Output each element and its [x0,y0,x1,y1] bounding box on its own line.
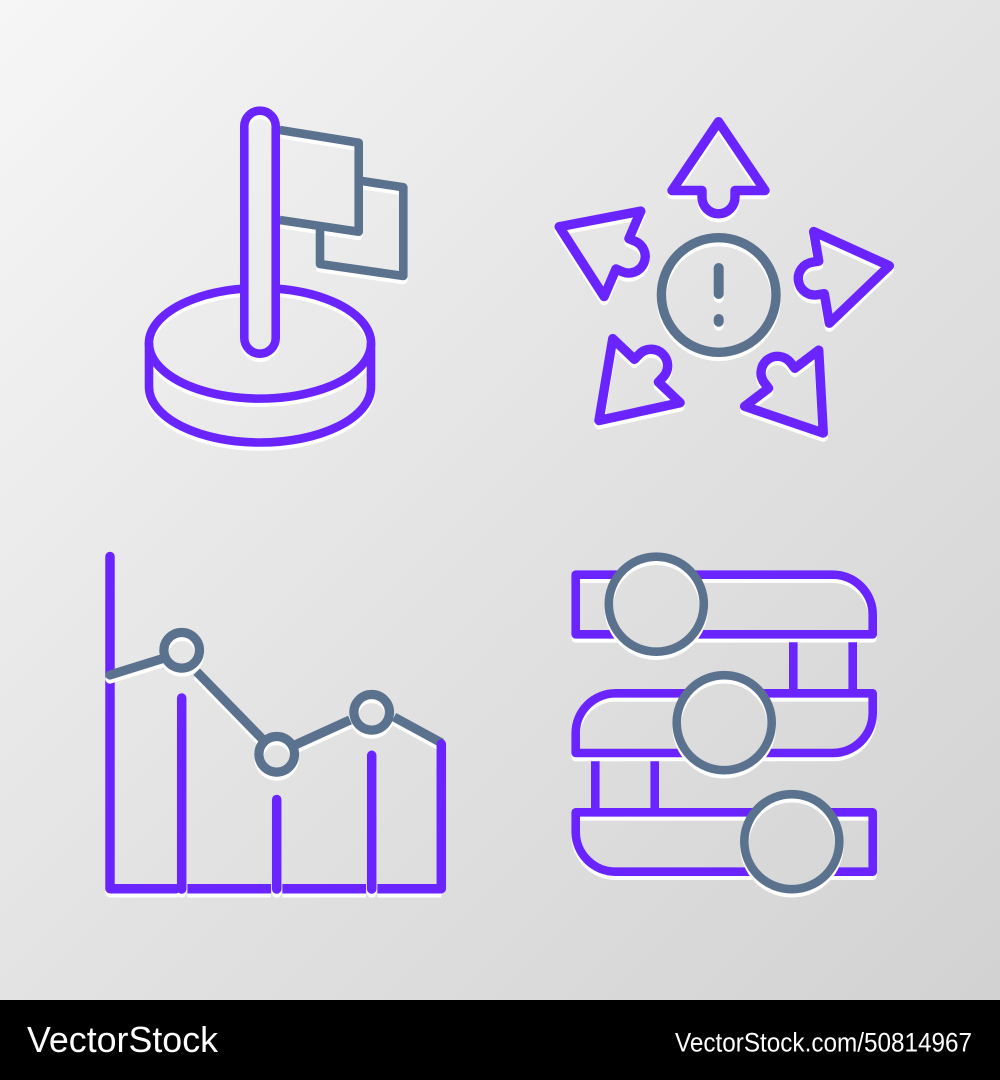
footer bar [0,1000,1000,1080]
five outward arrows [541,122,897,461]
icon: line and bar chart [110,556,442,889]
round base and pole [149,111,371,443]
alert circle with exclamation mark [661,238,776,352]
flag cloth [280,130,403,276]
trend line with markers [110,632,442,772]
icon: alert with five arrows [541,122,897,461]
icon: three toggle sliders [576,557,873,889]
slider knobs [609,557,839,889]
icon: flag on round base [149,111,403,443]
footer image id text: VectorStock.com/50814967 [675,1028,972,1058]
footer logo text: VectorStock [27,1019,219,1060]
right edge bar [437,744,446,889]
axes and bars [110,556,441,889]
slider tracks and connectors [576,575,873,872]
